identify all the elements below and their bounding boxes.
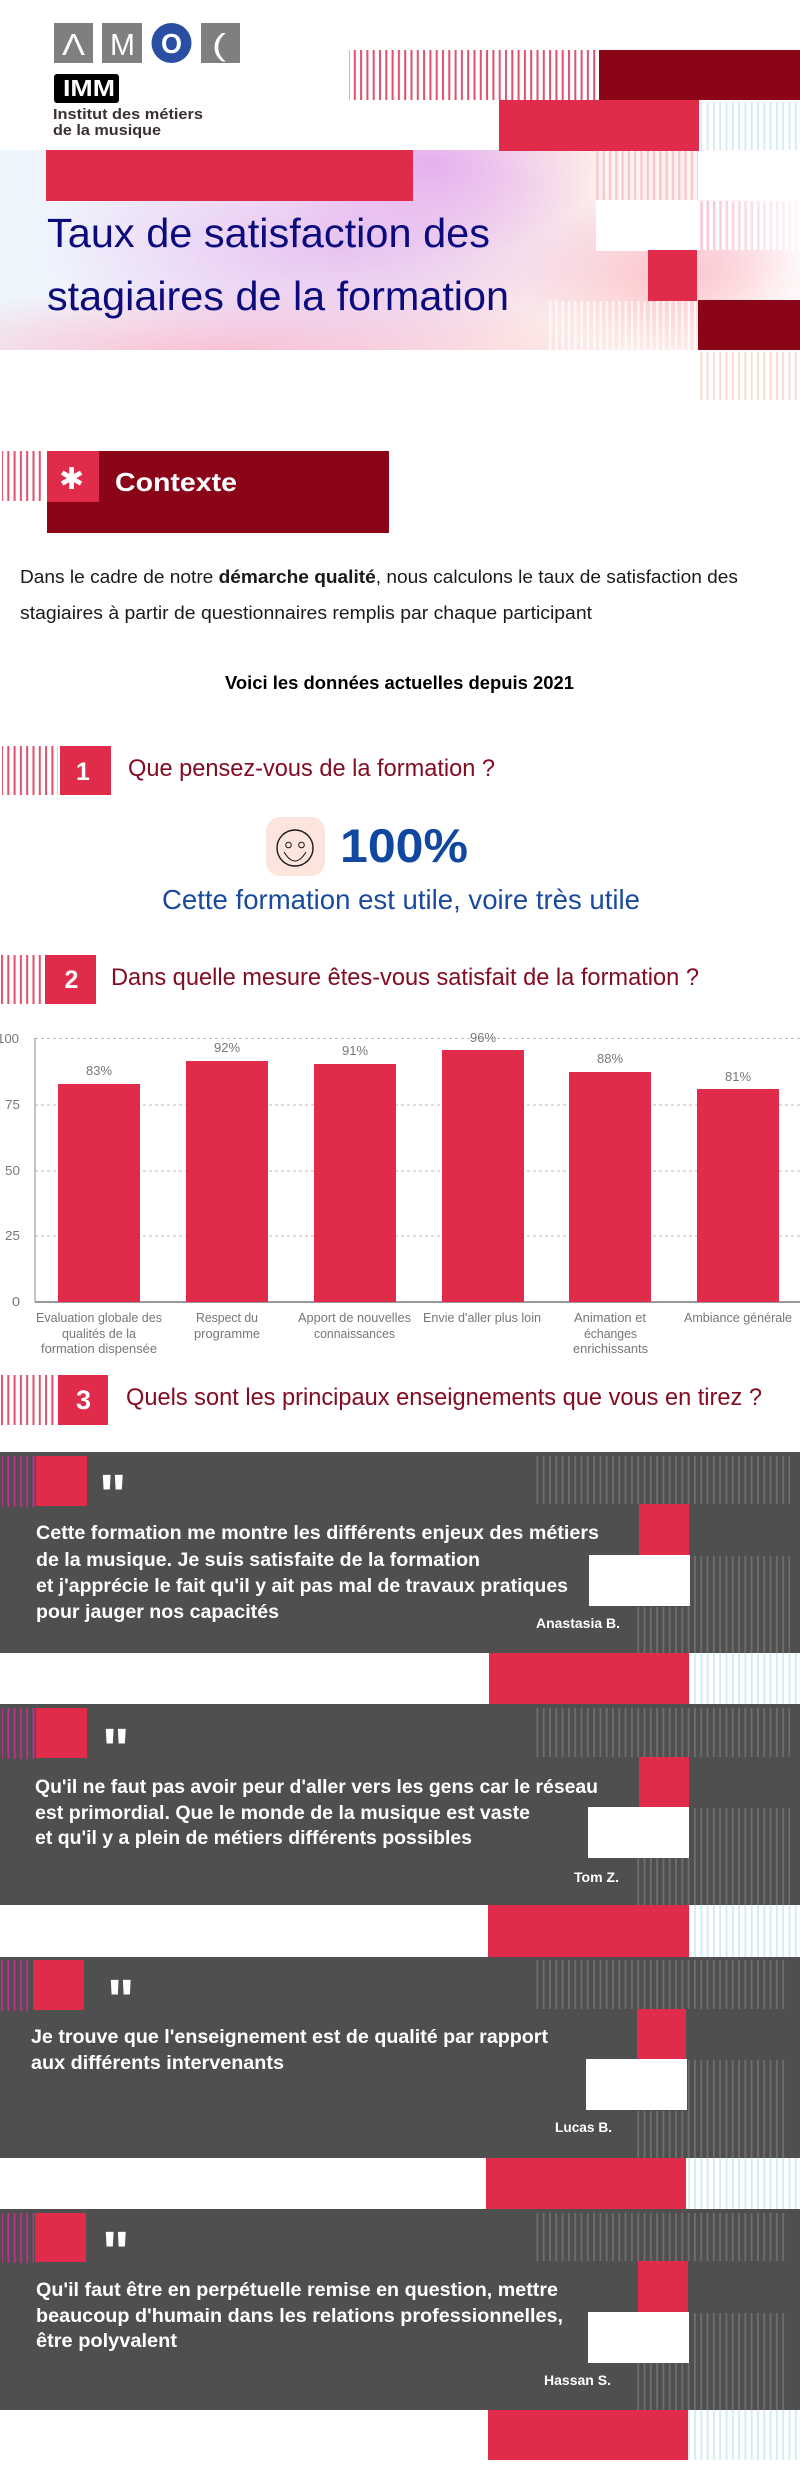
quote text: être polyvalent bbox=[36, 2330, 178, 2352]
quote text bbox=[36, 1522, 599, 1623]
icon: smiley bbox=[266, 817, 325, 876]
icon: quote mark: " bbox=[99, 1463, 126, 1528]
category labels: formation dispensée bbox=[41, 1341, 157, 1356]
text: data since 2021: Voici les données actuelles depuis 2021 bbox=[225, 673, 574, 693]
decorative strip under testimonial 3 bbox=[486, 2158, 800, 2209]
bar value labels: 91% bbox=[342, 1043, 368, 1058]
y axis labels bbox=[0, 1031, 20, 1309]
quote text bbox=[31, 2026, 548, 2074]
icon: quote mark: " bbox=[107, 1968, 134, 2033]
title bbox=[47, 210, 509, 319]
section 3 heading: 3 bbox=[76, 1385, 91, 1415]
banner red rectangle bbox=[46, 150, 413, 201]
category labels: Ambiance générale bbox=[684, 1310, 792, 1325]
text block: context paragraph bbox=[20, 567, 738, 623]
y axis labels: 0 bbox=[12, 1294, 20, 1309]
category labels: enrichissants bbox=[573, 1341, 648, 1356]
quote text: Qu'il faut être en perpétuelle remise en question, mettre bbox=[36, 2279, 558, 2301]
section 2 heading: Dans quelle mesure êtes-vous satisfait de la formation ? bbox=[111, 964, 699, 991]
panel: testimonial Tom Z. bbox=[0, 1704, 800, 1905]
section 1 heading: Que pensez-vous de la formation ? bbox=[128, 755, 495, 782]
category labels: Respect du bbox=[196, 1310, 258, 1325]
author: Hassan S. bbox=[544, 2372, 611, 2388]
bar value labels: 83% bbox=[86, 1063, 112, 1078]
title: Taux de satisfaction des bbox=[47, 210, 490, 256]
quote text: et qu'il y a plein de métiers différents possibles bbox=[35, 1827, 472, 1849]
category labels bbox=[36, 1310, 792, 1356]
bar value labels bbox=[86, 1030, 751, 1084]
quote text: est primordial. Que le monde de la musique est vaste bbox=[35, 1802, 530, 1824]
panel: testimonial Anastasia B. bbox=[0, 1452, 800, 1653]
decorative header blocks bbox=[349, 50, 800, 400]
category labels: Animation et bbox=[574, 1310, 646, 1325]
logo: IMM: de la musique bbox=[53, 123, 161, 139]
bar value labels: 92% bbox=[214, 1040, 240, 1055]
logo: IMM: IMM bbox=[63, 75, 115, 101]
quote text: Je trouve que l'enseignement est de qualité par rapport bbox=[31, 2026, 548, 2048]
y axis labels: 50 bbox=[5, 1163, 20, 1178]
stat: 100%: 100% bbox=[340, 819, 468, 872]
logo: AMOC: Λ bbox=[62, 27, 85, 62]
panel: testimonial Hassan S. bbox=[0, 2209, 800, 2410]
bar value labels: 88% bbox=[597, 1051, 623, 1066]
category labels: connaissances bbox=[314, 1326, 395, 1341]
category labels: programme bbox=[194, 1326, 260, 1341]
y axis labels: 75 bbox=[5, 1097, 20, 1112]
logo: AMOC: O bbox=[161, 28, 182, 59]
bar value labels: 96% bbox=[470, 1030, 496, 1045]
icon: quote mark: " bbox=[102, 1717, 130, 1782]
section 3 heading: Quels sont les principaux enseignements que vous en tirez ? bbox=[126, 1384, 762, 1411]
quote text bbox=[36, 2279, 563, 2352]
category labels: Apport de nouvelles bbox=[298, 1310, 411, 1325]
panel: contexte heading bbox=[2, 451, 389, 533]
author: Tom Z. bbox=[574, 1869, 619, 1885]
quote text: aux différents intervenants bbox=[31, 2052, 284, 2074]
quote text: de la musique. Je suis satisfaite de la formation bbox=[36, 1549, 480, 1571]
decorative strip under testimonial 1 bbox=[489, 1653, 800, 1704]
quote text bbox=[35, 1776, 598, 1849]
logo: AMOC: M bbox=[110, 27, 135, 62]
section 2 heading bbox=[0, 955, 699, 1004]
icon: asterisk bbox=[47, 451, 99, 502]
stat caption: Cette formation est utile, voire très utile bbox=[162, 884, 640, 915]
category labels: qualités de la bbox=[62, 1326, 137, 1341]
y axis labels: 25 bbox=[5, 1228, 20, 1243]
decorative strip under testimonial 4 bbox=[488, 2410, 800, 2460]
logo: AMOC: ( bbox=[212, 27, 227, 62]
bars bbox=[58, 1050, 779, 1302]
logo: IMM: Institut des métiers bbox=[53, 107, 203, 123]
quote text: Cette formation me montre les différents enjeux des métiers bbox=[36, 1522, 599, 1544]
icon: quote mark: " bbox=[102, 2220, 130, 2285]
category labels: échanges bbox=[584, 1326, 637, 1341]
category labels: Evaluation globale des bbox=[36, 1310, 162, 1325]
decorative strip under testimonial 2 bbox=[488, 1905, 800, 1957]
icon: asterisk: ✱ bbox=[59, 462, 84, 497]
heading: Contexte: Contexte bbox=[115, 467, 237, 497]
quote text: Qu'il ne faut pas avoir peur d'aller vers les gens car le réseau bbox=[35, 1776, 598, 1798]
text block: context paragraph: stagiaires à partir de questionnaires remplis par chaque participant bbox=[20, 603, 592, 623]
bar value labels: 81% bbox=[725, 1069, 751, 1084]
category labels: Envie d'aller plus loin bbox=[423, 1310, 541, 1325]
quote text: et j'apprécie le fait qu'il y ait pas mal de travaux pratiques bbox=[36, 1575, 568, 1597]
panel: testimonial Lucas B. bbox=[0, 1957, 800, 2158]
section 1 heading: 1 bbox=[76, 758, 90, 786]
section 1 heading bbox=[2, 746, 495, 795]
gradient banner background bbox=[0, 150, 800, 350]
title: stagiaires de la formation bbox=[47, 273, 509, 319]
logo: IMM bbox=[53, 74, 203, 139]
logo: AMOC bbox=[54, 23, 240, 63]
author: Lucas B. bbox=[555, 2119, 612, 2135]
quote text: pour jauger nos capacités bbox=[36, 1601, 279, 1623]
bar chart bbox=[0, 1030, 800, 1356]
text block: context paragraph: Dans le cadre de notre démarche qualité , nous calculons le taux de satisfaction des bbox=[20, 567, 738, 587]
section 2 heading: 2 bbox=[64, 966, 78, 994]
author: Anastasia B. bbox=[536, 1615, 620, 1631]
quote text: beaucoup d'humain dans les relations professionnelles, bbox=[36, 2305, 563, 2327]
section 3 heading bbox=[0, 1375, 762, 1425]
